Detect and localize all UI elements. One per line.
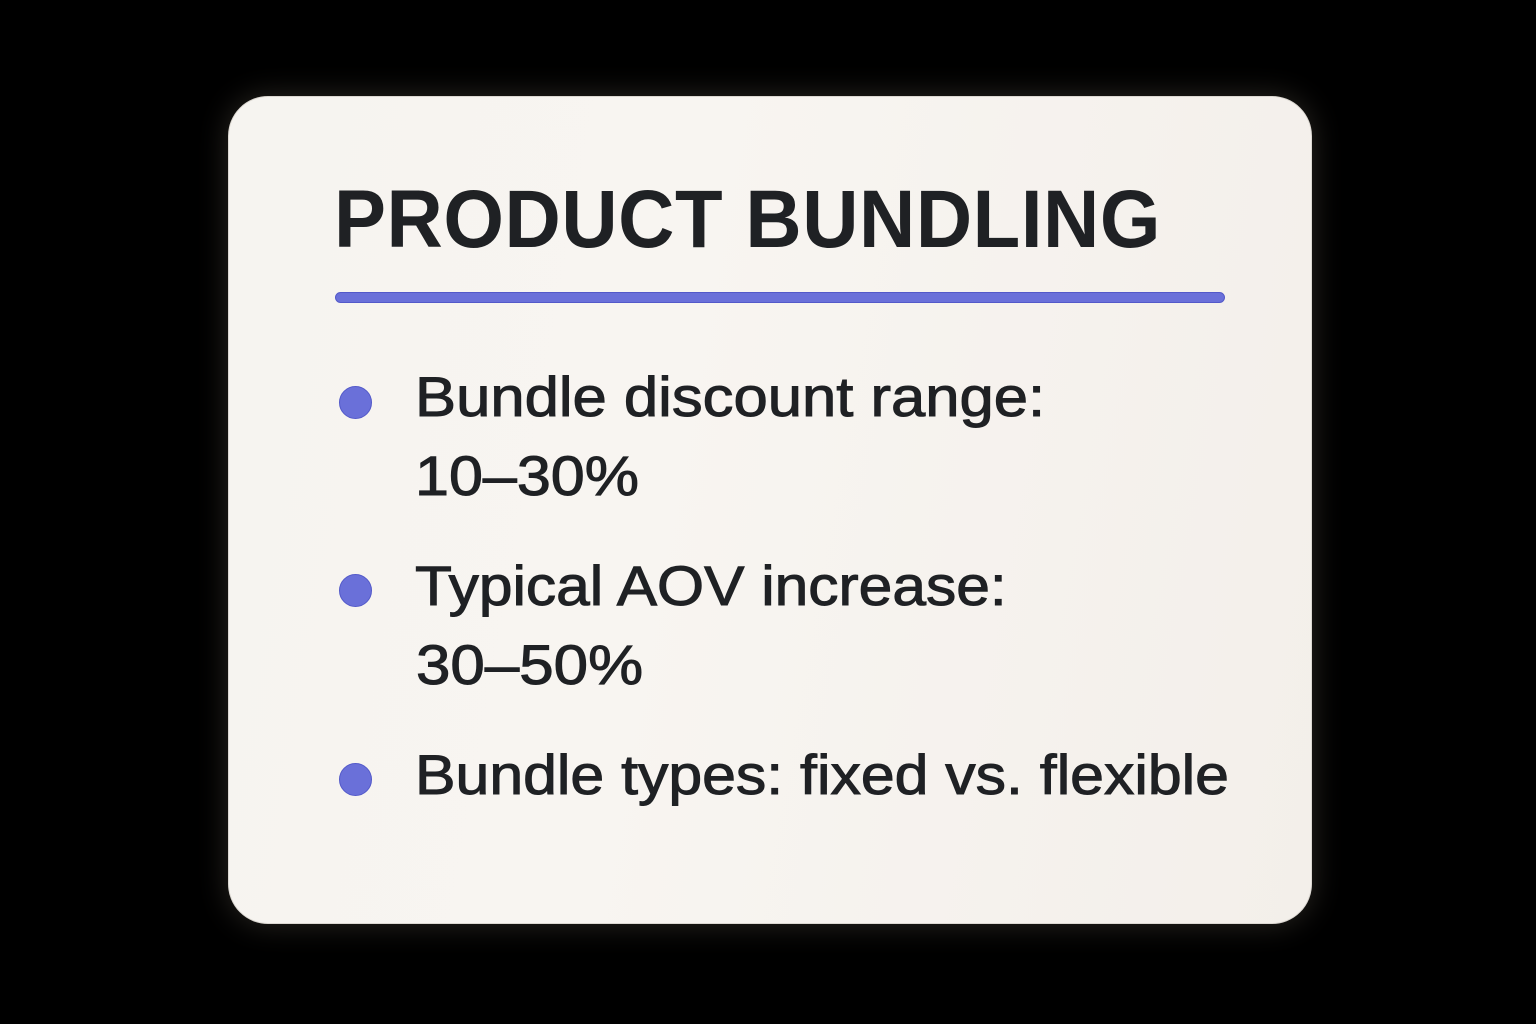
text: typical AOV increase: Typical AOV increase: [415, 554, 1007, 617]
bullet icon 2 [339, 574, 372, 607]
text: discount value: 10–30% [415, 444, 639, 507]
title underline [335, 292, 1225, 303]
title: PRODUCT BUNDLING [334, 174, 1161, 265]
text: bundle types: Bundle types: fixed vs. flexible [415, 743, 1229, 806]
panel: product bundling card [228, 96, 1312, 924]
text: AOV value: 30–50% [416, 633, 643, 696]
bullet icon 3 [339, 763, 372, 796]
text: bundle discount range: Bundle discount range: [415, 365, 1045, 428]
bullet icon 1 [339, 386, 372, 419]
